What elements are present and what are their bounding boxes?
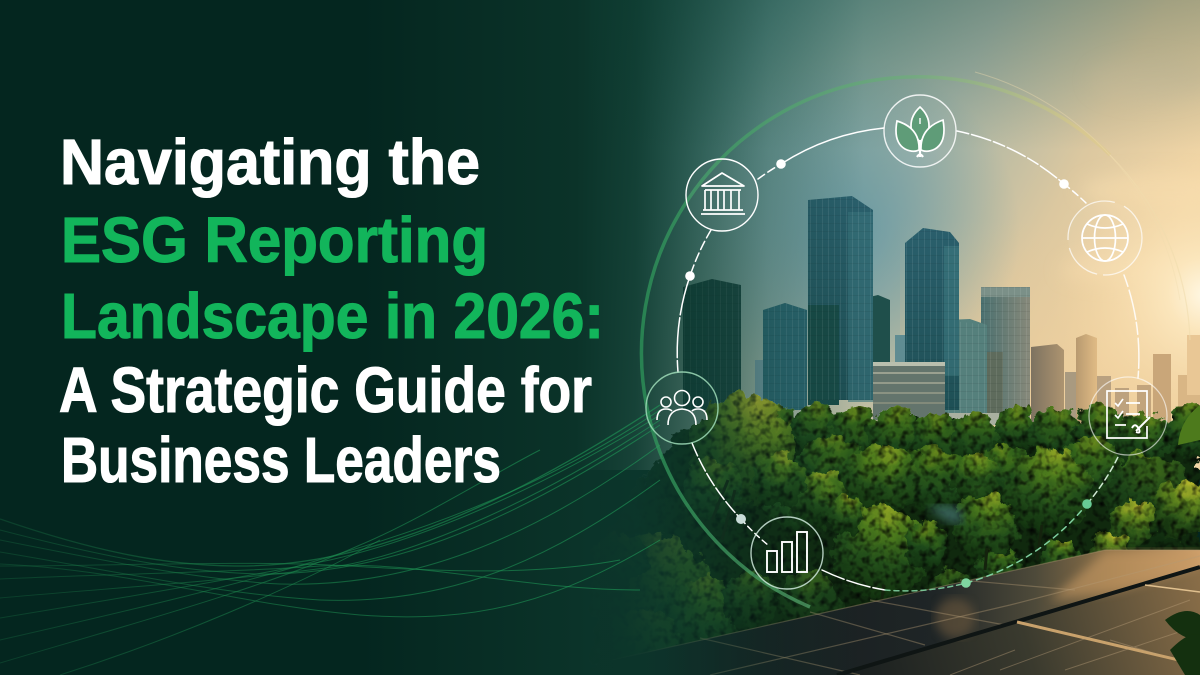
icon: bar chart	[751, 517, 823, 589]
far canopy	[744, 404, 1200, 468]
teal sky glow	[752, 100, 1004, 364]
large trees	[690, 394, 794, 506]
large gradient arc	[642, 72, 1190, 607]
flowing green lines	[0, 405, 660, 675]
title line 1: Navigating the	[60, 126, 480, 198]
icon: people	[646, 372, 718, 444]
solar panels	[612, 550, 1200, 675]
title line 3: Landscape in 2026:	[61, 280, 604, 352]
skyline	[683, 196, 1200, 438]
icon: globe	[1068, 201, 1142, 275]
title line 5: Business Leaders	[61, 424, 501, 496]
sun glow	[1118, 218, 1200, 380]
title line 4: A Strategic Guide for	[59, 354, 592, 426]
foreground leaves	[1165, 611, 1200, 675]
sky	[560, 0, 1200, 470]
right edge foliage	[1178, 405, 1200, 445]
title	[59, 126, 604, 496]
bottom left forest fade	[600, 480, 690, 675]
sunset clouds	[1092, 180, 1130, 198]
top shading	[590, 0, 1200, 150]
dashed orbit	[677, 128, 1139, 591]
forest	[640, 388, 1200, 648]
low pale building	[873, 362, 999, 425]
panel frame lines	[612, 550, 1200, 675]
warm horizon	[900, 298, 1172, 420]
tree trunks	[712, 480, 1042, 610]
icon: leaf sprout	[884, 95, 956, 167]
icon: bank	[686, 159, 758, 231]
photo: city and forest	[560, 0, 1200, 675]
icon: checklist	[1089, 377, 1167, 455]
orbit dots	[685, 159, 1092, 588]
pond	[928, 505, 963, 523]
title line 2: ESG Reporting	[61, 204, 488, 276]
